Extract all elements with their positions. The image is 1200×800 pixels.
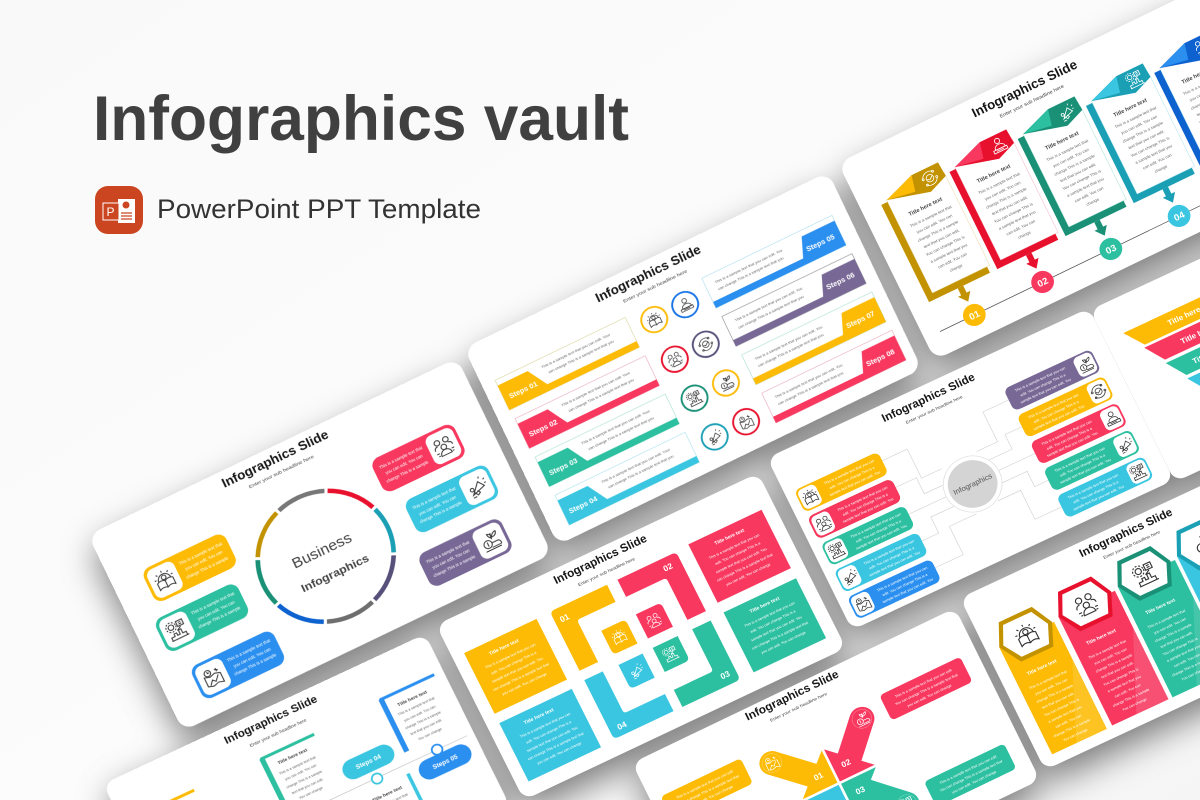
band pink — [1144, 225, 1200, 365]
step 05 — [702, 215, 846, 308]
text box teal — [924, 743, 1016, 800]
node 04 — [370, 772, 384, 785]
card: cyan — [403, 463, 501, 535]
step 08: can change This is a sample text that you — [778, 371, 844, 406]
left box 3: edit. You can change This is a — [855, 519, 903, 544]
left box 5 — [847, 559, 942, 620]
step 07: Steps 07 — [845, 309, 876, 330]
text box yellow — [661, 758, 753, 800]
column teal: a sample text that you — [1166, 644, 1200, 663]
corner 04: 04 — [615, 719, 629, 732]
card green: This is a sample text that — [278, 755, 316, 776]
panel: hexagon columns — [960, 448, 1200, 770]
text box pink: You can change This is a sample text that — [894, 673, 958, 706]
column teal: text that you can edit. — [1160, 631, 1194, 649]
column 05 — [1148, 30, 1200, 170]
text box pink: you can edit. You can change — [725, 562, 771, 587]
step 03: can change This is a sample text that you — [588, 416, 655, 451]
column yellow: you can edit. You can — [1035, 678, 1068, 696]
column yellow: change This is a sample — [1053, 718, 1091, 738]
card: pink: change This is a sample — [386, 459, 430, 484]
column 03 — [1012, 96, 1148, 274]
left box 4: This is a sample text that you can — [863, 539, 915, 566]
sub heading: Enter your sub headline here — [622, 269, 689, 305]
text box teal: This is a sample text that you can edit — [939, 755, 997, 785]
panel: funnel — [1090, 160, 1200, 482]
column yellow — [989, 601, 1107, 754]
text box teal: You can change This is a sample text that — [939, 759, 1003, 793]
column 03: This is a sample text that — [1046, 138, 1090, 162]
card: pink: This is a sample text that — [378, 445, 424, 470]
right box 5: sample text that you can edit. You — [1073, 485, 1125, 511]
column 02: You can change This is — [993, 201, 1034, 224]
card: cyan: you can edit. You can — [418, 494, 458, 516]
column teal: This is a sample text that — [1147, 609, 1186, 630]
step 02 — [515, 356, 659, 448]
text box teal: you can edit. You can change — [761, 631, 806, 655]
right box 4: sample text that you can edit. You — [1059, 458, 1112, 485]
column 01: change This is a sample — [917, 219, 960, 243]
right box 1: sample text that you can edit. You — [1020, 377, 1072, 404]
heading: Infographics Slide — [969, 57, 1080, 120]
step 01: can change This is a sample text that you — [548, 340, 615, 375]
column pink: text that you can edit. — [1101, 661, 1134, 679]
card yellow — [140, 789, 220, 800]
arrow 04 — [793, 785, 859, 800]
centre tile teal — [653, 636, 690, 672]
panel: hub and spoke — [767, 308, 1174, 630]
column pink: This is a sample text that — [1088, 639, 1127, 660]
text box teal: edit. You can change This is a — [750, 609, 797, 634]
column 04: text that you can edit. — [1128, 129, 1165, 150]
text box yellow: can change This is a sample text that — [492, 662, 550, 692]
column 04: change — [1154, 163, 1169, 174]
right box 4: edit. You can change This is a — [1059, 453, 1107, 478]
column 02: can edit. You can — [1005, 218, 1036, 236]
left box 4: edit. You can change This is a — [869, 546, 916, 570]
column 04: change This is a sample — [1122, 120, 1164, 144]
subtitle: PowerPoint PPT Template — [157, 194, 481, 224]
text box cyan: sample text that you can edit. You — [526, 726, 578, 753]
text box cyan — [499, 689, 601, 781]
column yellow: You can change This is — [1043, 698, 1080, 717]
column pink — [1048, 570, 1169, 726]
column 01: 01 — [967, 308, 982, 322]
column 01: you can edit. You can — [916, 213, 953, 234]
column 02: Title here text — [976, 164, 1012, 185]
card: purple — [416, 516, 515, 589]
column 03: change This is a sample — [1053, 153, 1096, 177]
text box cyan: This is a sample text that you can — [519, 712, 571, 739]
right box 2 — [1017, 376, 1115, 438]
step 08 — [762, 330, 906, 423]
column 03: can edit. You can — [1074, 185, 1104, 203]
step 07: This is a sample text that you can edit. You — [754, 325, 823, 361]
column 04: This is a sample text that — [1114, 105, 1158, 129]
column 02 — [943, 129, 1080, 307]
column teal: you can edit. You can — [1153, 617, 1187, 635]
column 02: This is a sample text that — [977, 171, 1021, 195]
card: yellow: change This is a sample — [185, 555, 230, 580]
sub heading: Enter your sub headline here — [249, 717, 308, 748]
card: teal: This is a sample text that — [190, 591, 236, 616]
card blue: This is a sample text that — [397, 696, 435, 717]
card: cyan: change This is a sample — [419, 500, 463, 524]
column 01: text that you can edit. — [923, 228, 960, 249]
column 03: You can change This is — [1061, 168, 1102, 191]
left box 3 — [820, 505, 915, 566]
step 05: Steps 05 — [805, 232, 836, 254]
text box pink — [879, 657, 973, 721]
column 02: you can edit. You can — [984, 180, 1021, 201]
card blue: text that you can edit. — [410, 718, 443, 736]
column 03: text that you can edit. — [1059, 162, 1097, 183]
panel: steps list — [464, 172, 922, 545]
text box teal: can change This is a sample text that — [751, 621, 809, 651]
step 05: This is a sample text that you can edit. You — [714, 248, 783, 284]
left box 5: sample text that you can edit. You — [882, 577, 934, 604]
sub heading: Enter your sub headline here — [769, 691, 828, 723]
left box 2: edit. You can change This is a — [842, 492, 889, 517]
step 03: This is a sample text that you can edit. Your — [581, 409, 651, 446]
icon: PowerPoint logo — [95, 186, 143, 234]
column 01: can edit. You can — [937, 251, 968, 269]
left box 1 — [794, 452, 889, 513]
column pink: change This is a sample — [1095, 653, 1133, 674]
heading: Infographics Slide — [593, 242, 703, 305]
centre tile pink — [636, 603, 673, 639]
arrow 02: 02 — [839, 756, 853, 769]
hub circle: Infographics — [952, 471, 994, 497]
heading: Infographics Slide — [743, 668, 841, 723]
right box 5: edit. You can change This is a — [1073, 480, 1120, 504]
column 01: Title here text — [908, 197, 944, 218]
column 04: can edit. You can — [1142, 152, 1172, 170]
heading: Infographics Slide — [1077, 506, 1175, 560]
band yellow — [1123, 200, 1200, 351]
arrow 02 — [815, 706, 892, 781]
pill steps 04: Steps 04 — [355, 754, 383, 771]
panel: converging arrows — [632, 608, 1040, 800]
timeline line — [940, 163, 1200, 332]
column yellow: You can change — [1062, 728, 1088, 742]
right box 3 — [1030, 402, 1128, 465]
step 01: Steps 01 — [507, 379, 539, 401]
column pink: a sample text that you — [1107, 675, 1142, 693]
corner 02: 02 — [661, 561, 675, 574]
card blue: Title here text — [397, 689, 429, 708]
card green: You can change — [298, 786, 324, 800]
left box 1: This is a sample text that you can — [823, 459, 875, 486]
text box teal: This is a sample text that you can — [744, 601, 795, 628]
text box pink: This is a sample text that you can — [708, 533, 760, 560]
column 02: change — [1017, 229, 1032, 240]
step 04: Steps 04 — [567, 494, 600, 516]
card: teal: you can edit. You can — [197, 599, 236, 621]
card green: Title here text — [277, 747, 309, 766]
band cyan — [1187, 276, 1200, 396]
card blue — [378, 673, 460, 753]
heading: Infographics Slide — [219, 427, 331, 490]
ring label: Business — [289, 530, 355, 572]
column 03: 03 — [1104, 242, 1118, 256]
left box 3: sample text that you can edit. You — [855, 524, 907, 551]
column 02: 02 — [1035, 275, 1050, 289]
text box yellow: This is a sample text that you can edit — [676, 769, 734, 800]
arrow 01 — [759, 733, 837, 800]
step 03 — [535, 394, 679, 487]
card green: text that you can edit. — [291, 777, 324, 795]
text box yellow: you can edit. You can change — [502, 672, 547, 696]
column teal — [1108, 539, 1200, 697]
column yellow: This is a sample text that — [1029, 670, 1068, 690]
column 04: Title here text — [1113, 98, 1148, 119]
card green — [259, 733, 340, 800]
step 04: This is a sample text that you can edit. Your — [601, 447, 671, 484]
text box pink: Title here text — [714, 528, 746, 547]
column 01: a sample text that you — [930, 242, 968, 264]
arrow 03 — [841, 758, 920, 800]
sub heading: Enter your sub headline here — [577, 556, 636, 587]
right box 2: This is a sample text that you can — [1028, 393, 1079, 420]
column 04: You can change This is — [1130, 135, 1170, 158]
right box 3: sample text that you can edit. You — [1046, 431, 1098, 458]
column 04: a sample text that you — [1134, 143, 1173, 165]
right box 1: edit. You can change This is a — [1020, 373, 1067, 397]
corner 02 — [617, 552, 706, 639]
text box pink: can change This is a sample text that — [716, 553, 774, 583]
text box pink: you can edit. You can change — [907, 683, 952, 708]
text box pink — [688, 510, 791, 603]
left box 3: This is a sample text that you can — [850, 512, 902, 539]
card: purple: you can edit. You can — [432, 548, 471, 570]
column yellow: change This is a sample — [1036, 684, 1074, 704]
sub heading: Enter your sub headline here — [248, 454, 315, 490]
corner 01: 01 — [558, 611, 571, 624]
step 01: This is a sample text that you can edit. Your — [541, 332, 612, 369]
card: purple: This is a sample text that — [425, 539, 471, 564]
column cyan — [1167, 509, 1200, 669]
right box 2: sample text that you can edit. You — [1033, 404, 1085, 431]
step 04: can change This is a sample text that you — [608, 454, 675, 489]
corner 04 — [584, 652, 674, 739]
column 04: 04 — [1172, 208, 1187, 223]
pill steps 05: Steps 05 — [432, 754, 460, 771]
sub heading: Enter your sub headline here — [905, 394, 964, 425]
sub heading: Enter your sub headline here — [1102, 529, 1162, 560]
step 08: Steps 08 — [865, 347, 896, 369]
column 03: a sample text that you — [1066, 176, 1105, 198]
right box 3: This is a sample text that you can — [1041, 420, 1092, 446]
card: blue — [189, 629, 287, 701]
pill steps 05 — [415, 741, 475, 783]
column teal: change This is a sample — [1154, 623, 1192, 643]
column 04 — [1080, 63, 1200, 241]
column 04: you can edit. You can — [1120, 114, 1158, 135]
column 01: This is a sample text that — [909, 204, 953, 228]
column 03: Title here text — [1044, 131, 1080, 152]
arrow 01: 01 — [812, 770, 825, 783]
right box 2: edit. You can change This is a — [1033, 399, 1080, 424]
right box 5: This is a sample text that you can — [1067, 473, 1119, 500]
text box pink: sample text that you can edit. You — [715, 547, 767, 574]
step 03: Steps 03 — [547, 456, 579, 477]
step 02: This is a sample text that you can edit. Your — [561, 371, 631, 408]
card: pink — [369, 422, 468, 494]
card: pink: you can edit. You can — [385, 453, 424, 475]
corner 03: 03 — [719, 668, 732, 681]
right box 3: edit. You can change This is a — [1046, 426, 1094, 451]
left box 2 — [807, 478, 902, 539]
heading: Infographics Slide — [222, 693, 320, 747]
step 06: This is a sample text that you can edit. You — [734, 287, 803, 323]
column 01: You can change This is — [925, 234, 965, 257]
card: teal: change This is a sample — [198, 605, 242, 630]
left box 2: This is a sample text that you can — [837, 486, 888, 512]
text box teal: you can edit. You can change — [951, 770, 997, 794]
column pink: You can change — [1122, 697, 1147, 712]
main title: Infographics vault — [93, 84, 629, 154]
left box 5: This is a sample text that you can — [876, 566, 928, 593]
text box yellow: Title here text — [488, 638, 520, 657]
step 06: Steps 06 — [825, 271, 856, 292]
step 07 — [742, 292, 886, 385]
card: yellow — [141, 532, 239, 604]
text box yellow — [464, 619, 567, 714]
step 01 — [495, 317, 639, 410]
step 08: This is a sample text that you can edit. You — [774, 363, 843, 399]
step 02: Steps 02 — [527, 418, 559, 439]
card blue: you can edit. You can — [403, 704, 436, 722]
panel: circle business infographic — [88, 358, 552, 731]
text box cyan: can change This is a sample text that — [527, 731, 584, 761]
corner 01 — [550, 585, 637, 671]
column yellow: text that you can edit. — [1041, 691, 1075, 710]
column yellow: can edit. You can — [1055, 714, 1082, 729]
node 05 — [430, 743, 444, 757]
right box 1: This is a sample text that you can — [1014, 366, 1066, 393]
sub heading: Enter your sub headline here — [999, 84, 1065, 120]
connector lines — [881, 400, 1062, 568]
step 06: can change This is a sample text that you — [738, 295, 804, 330]
left box 5: edit. You can change This is a — [882, 572, 929, 597]
card: blue: change This is a sample — [234, 652, 278, 677]
panel: folder timeline — [838, 0, 1200, 360]
hub circle — [934, 446, 1012, 522]
card: teal — [153, 581, 251, 654]
heading: Infographics Slide — [880, 371, 978, 425]
icon: PowerPoint logo: P — [106, 205, 115, 219]
card green: change This is a sample — [286, 769, 323, 789]
column teal: You can change This is — [1162, 637, 1199, 657]
column yellow: Title here text — [1026, 658, 1058, 677]
text box cyan: edit. You can change This is a — [525, 720, 573, 745]
text box cyan: Title here text — [523, 707, 555, 726]
column pink: You can change This is — [1103, 667, 1139, 687]
column 03: you can edit. You can — [1052, 147, 1090, 168]
column 02: change This is a sample — [985, 186, 1028, 210]
card cyan — [353, 773, 436, 800]
left box 4 — [834, 532, 928, 593]
left box 4: sample text that you can edit. You — [869, 550, 921, 577]
text box yellow: edit. You can change This is a — [491, 650, 538, 675]
ring label — [287, 527, 371, 595]
timeline line — [160, 736, 468, 800]
step 06 — [722, 254, 866, 346]
corner 03 — [653, 620, 740, 707]
panel: stepped timeline — [103, 634, 510, 800]
step 05: can change This is a sample text that you — [718, 256, 784, 291]
right box 4: This is a sample text that you can — [1054, 446, 1106, 473]
left box 1: sample text that you can edit. You — [829, 470, 881, 497]
column 01: change — [949, 262, 964, 273]
panel: nested squares — [436, 473, 846, 800]
card: blue: This is a sample text that — [226, 638, 272, 663]
heading: Infographics Slide — [552, 532, 649, 587]
card: blue: you can edit. You can — [233, 646, 272, 669]
icon rings — [637, 286, 763, 456]
card blue: change This is a sample — [405, 710, 442, 730]
column teal: can edit. You can — [1173, 653, 1200, 668]
step 02: can change This is a sample text that you — [568, 378, 635, 413]
pill steps 04 — [339, 741, 398, 783]
column pink: can edit. You can — [1114, 683, 1141, 699]
column 02: text that you can edit. — [991, 195, 1029, 216]
column teal: Title here text — [1145, 597, 1177, 616]
text box yellow: sample text that you can edit. You — [491, 656, 544, 684]
centre tile cyan — [618, 654, 655, 689]
text box yellow: This is a sample text that you can — [485, 643, 536, 670]
column 02: a sample text that you — [998, 209, 1036, 231]
card green: you can edit. You can — [284, 764, 317, 782]
ring label: Infographics — [300, 553, 371, 595]
card: cyan: This is a sample text that — [412, 486, 457, 511]
text box cyan: you can edit. You can change — [536, 741, 582, 766]
band teal — [1166, 251, 1200, 381]
left box 1: edit. You can change This is a — [829, 465, 876, 490]
column pink: change This is a sample — [1112, 688, 1150, 708]
step 07: can change This is a sample text that you — [757, 333, 824, 368]
column 03: change — [1085, 196, 1100, 207]
right box 4 — [1043, 429, 1141, 492]
card: yellow: This is a sample text that — [178, 541, 224, 566]
arrow 03: 03 — [854, 784, 867, 797]
card: yellow: you can edit. You can — [184, 549, 224, 571]
text box teal: Title here text — [749, 596, 781, 615]
right box 1 — [1003, 349, 1101, 411]
right box 5 — [1056, 456, 1154, 518]
column yellow: a sample text that you — [1048, 705, 1082, 724]
text box teal: sample text that you can edit. You — [750, 615, 803, 642]
left box 2: sample text that you can edit. You — [842, 497, 894, 524]
step 04 — [555, 432, 699, 525]
card blue: You can change — [417, 727, 442, 741]
card: purple: change This is a sample — [432, 553, 477, 578]
column pink: you can edit. You can — [1094, 647, 1128, 666]
text box pink: This is a sample text that you can edit — [894, 668, 953, 699]
centre tile yellow — [601, 619, 638, 655]
column pink: Title here text — [1085, 628, 1117, 647]
column 01 — [875, 162, 1011, 340]
ring chart — [205, 438, 447, 674]
text box pink: edit. You can change This is a — [715, 541, 762, 566]
text box teal — [724, 578, 826, 672]
